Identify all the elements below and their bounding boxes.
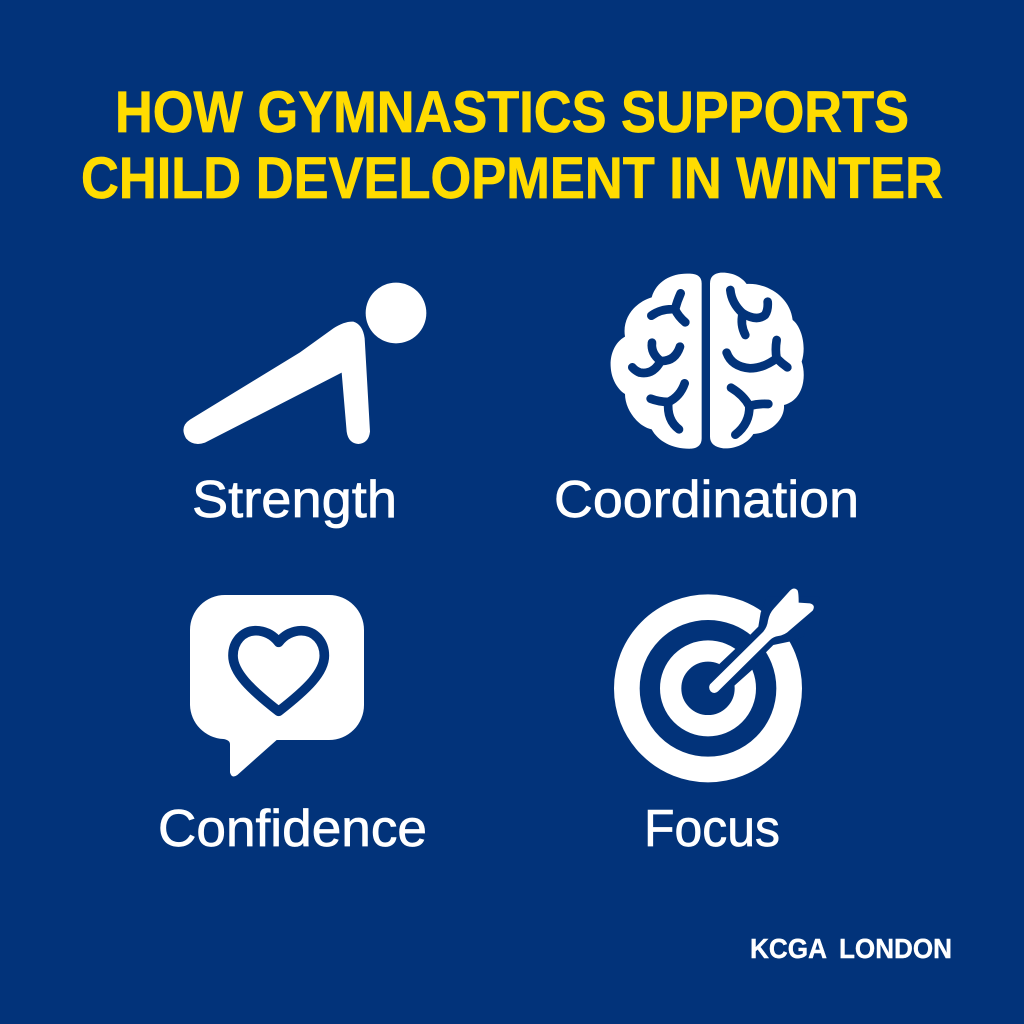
- label: confidence: Confidence: [158, 800, 427, 858]
- title: CHILD DEVELOPMENT IN WINTER: [81, 146, 943, 211]
- panel: strength: [183, 283, 426, 529]
- icon: push-up figure: [183, 283, 426, 444]
- panel: confidence: [158, 595, 427, 858]
- label: strength: Strength: [192, 471, 397, 529]
- panel: focus: [627, 588, 820, 858]
- title: HOW GYMNASTICS SUPPORTS: [115, 80, 909, 145]
- brand label: KCGA: [750, 933, 827, 964]
- icon: target with arrow: [627, 588, 820, 769]
- icon: speech bubble with heart: [190, 595, 364, 776]
- panel: coordination: [554, 273, 859, 529]
- label: focus: Focus: [644, 800, 780, 858]
- title: [81, 80, 943, 211]
- icon: brain: [611, 273, 804, 449]
- brand label: LONDON: [839, 933, 952, 964]
- brand label: [750, 933, 952, 964]
- label: coordination: Coordination: [554, 471, 859, 529]
